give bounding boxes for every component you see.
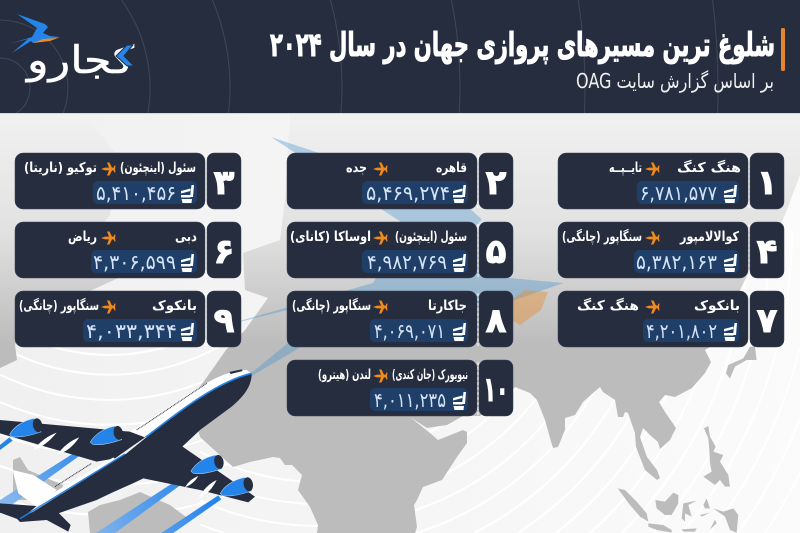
route card 7: هنگ کنگ — [577, 297, 639, 314]
route card 3: ۳ — [214, 163, 235, 203]
route card 6: دبی — [175, 229, 197, 245]
route card 5: ۵ — [486, 232, 506, 272]
route card 8: جاکارتا — [428, 298, 467, 314]
route card 10: نیویورک (جان کندی) — [392, 367, 468, 383]
route card 1: هنگ کنگ — [677, 159, 741, 176]
route card 5: سئول (اینچئون) — [395, 229, 467, 245]
route card 2: ۲ — [486, 163, 507, 203]
header band — [0, 0, 800, 114]
right wing — [143, 446, 255, 502]
left wing — [0, 420, 145, 462]
route card 3: توکیو (ناریتا) — [24, 160, 97, 176]
title accent bar — [781, 28, 785, 71]
route card 3: سئول (اینچئون) — [120, 160, 196, 176]
route card 9 — [15, 291, 241, 347]
wing flaps — [33, 433, 217, 498]
route card 2 — [287, 153, 513, 209]
route card 7: بانکوک — [694, 298, 740, 314]
engines — [7, 417, 255, 498]
route card 10: لندن (هیترو) — [318, 367, 371, 383]
route card 2: قاهره — [436, 160, 467, 176]
route card 8: ۴,۰۶۹,۰۷۱ — [374, 319, 445, 343]
route card 2: جده — [346, 160, 367, 176]
logo chevron — [116, 45, 134, 66]
watermark swallow — [217, 137, 563, 385]
route card 2: ۵,۴۶۹,۲۷۴ — [366, 181, 450, 205]
logo — [9, 14, 135, 83]
route card 10 — [287, 360, 513, 416]
route card 6: ریاض — [68, 229, 97, 245]
route card 4: ۵,۳۸۲,۱۶۳ — [636, 250, 717, 274]
logo bird — [9, 14, 60, 53]
background map — [0, 113, 800, 533]
route card 9: سنگاپور (چانگی) — [19, 297, 99, 314]
white tail fin — [13, 470, 57, 507]
route card 5: ۴,۹۸۲,۷۶۹ — [367, 250, 447, 274]
route card 6: ۶ — [214, 232, 234, 272]
route card 5: اوساکا (کانای) — [290, 229, 371, 245]
route card 7 — [558, 291, 784, 347]
route card 7: ۴,۲۰۱,۸۰۲ — [646, 319, 717, 343]
tail planes — [0, 503, 71, 532]
route card 3: ۵,۴۱۰,۴۵۶ — [96, 181, 176, 205]
route card 5 — [287, 222, 513, 278]
contrails — [0, 437, 221, 533]
route card 1: ۶,۷۸۱,۵۷۷ — [640, 181, 717, 205]
route card 9: ۹ — [214, 301, 235, 341]
route card 4: کوالالامپور — [679, 229, 739, 245]
route card 9: ۴,۰۳۳,۳۴۴ — [86, 319, 177, 343]
route card 3 — [15, 153, 241, 209]
route card 1 — [558, 153, 784, 209]
route card 8: سنگاپور (چانگی) — [292, 297, 371, 314]
route card 10: ۱۰ — [484, 370, 508, 410]
logo wordmark: کجارو — [25, 38, 135, 83]
route card 8: ۸ — [486, 301, 507, 341]
route card 8 — [287, 291, 513, 347]
route card 4 — [558, 222, 784, 278]
route card 1: ۱ — [757, 163, 777, 203]
route card 7: ۷ — [757, 301, 778, 341]
fuselage — [20, 374, 252, 520]
route card 4: ۴ — [757, 232, 777, 272]
airplane illustration — [0, 369, 255, 533]
route card 4: سنگاپور (چانگی) — [562, 228, 642, 245]
route card 10: ۴,۰۱۱,۲۳۵ — [374, 388, 446, 412]
route card 6 — [15, 222, 241, 278]
route card 6: ۴,۳۰۶,۵۹۹ — [93, 250, 176, 274]
route card 9: بانکوک — [152, 298, 197, 314]
route card 1: تایــپــه — [609, 160, 642, 176]
